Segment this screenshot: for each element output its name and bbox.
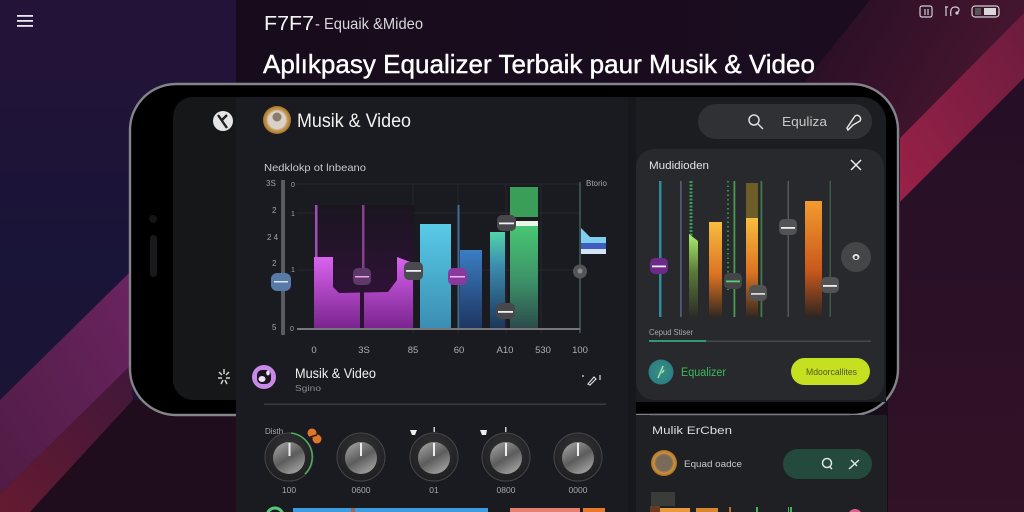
lower right panel: Equad oadce xyxy=(684,459,742,470)
chart x-axis labels: 3S xyxy=(358,345,370,356)
lower panel green pill xyxy=(783,449,872,479)
lower panel thumbnails xyxy=(650,492,862,512)
phone frame xyxy=(130,84,898,415)
chart x-axis labels: 100 xyxy=(572,345,588,356)
equalizer chart xyxy=(266,179,607,356)
knobs row: Disth xyxy=(265,427,283,436)
chart y-axis labels: 0 xyxy=(291,182,295,189)
top label: - Equaik &Mideo xyxy=(315,16,423,33)
knob 3: 01 xyxy=(429,485,439,495)
chart slider handles xyxy=(271,215,587,319)
section: music and video header: Sgino xyxy=(295,384,322,393)
knob 2: 0600 xyxy=(352,485,371,495)
chart y-axis labels: 3S xyxy=(266,179,276,188)
chart y-axis labels: 0 xyxy=(290,326,294,333)
lime button xyxy=(791,358,870,385)
screen left rail xyxy=(173,97,293,400)
main column xyxy=(236,97,887,512)
lower right panel: Mulik ErCben xyxy=(652,425,732,437)
knob 1: 100 xyxy=(282,485,296,495)
chart y-axis labels: 1 xyxy=(291,211,295,218)
chart y-axis labels: 2 4 xyxy=(267,233,279,242)
top label: F7F7 xyxy=(264,13,314,35)
chart y-axis labels xyxy=(266,179,607,333)
section: music and video header xyxy=(252,365,600,393)
orange badge xyxy=(308,428,322,444)
chart y-axis labels: 1 xyxy=(291,267,295,274)
app header xyxy=(263,106,411,134)
app header: Musik & Video xyxy=(297,111,411,132)
knob 5 xyxy=(554,433,602,495)
lower panel avatar xyxy=(651,450,677,476)
equalizer label: Equalizer xyxy=(681,367,726,379)
search pill: Equliza xyxy=(782,115,827,129)
knob 4: 0800 xyxy=(497,485,516,495)
floating panel: mixer xyxy=(636,149,884,400)
chart y-axis labels: 2 xyxy=(272,259,277,268)
knob 2 xyxy=(337,433,385,495)
divider xyxy=(264,404,606,405)
hamburger menu icon xyxy=(17,15,33,27)
lower right panel xyxy=(650,425,872,512)
chart y-axis labels: 5 xyxy=(272,323,277,332)
progress slider: Cepud Stiser xyxy=(649,327,693,337)
mixer bars and sliders xyxy=(650,181,839,317)
knob 4 xyxy=(480,427,530,495)
section: music and video header: Musik & Video xyxy=(295,365,376,381)
top label xyxy=(264,13,423,35)
lime button: Mdoorcallites xyxy=(806,367,857,378)
chart x-axis labels: 0 xyxy=(311,345,317,356)
title: Aplıkpasy Equalizer Terbaik paur Musik & Video xyxy=(263,49,815,79)
chart x-axis labels: 85 xyxy=(408,345,418,356)
chart x-axis labels: 60 xyxy=(454,345,464,356)
knobs row xyxy=(265,427,602,495)
chart x-axis labels xyxy=(311,345,588,356)
knob 5: 0000 xyxy=(569,485,588,495)
close icon xyxy=(851,160,861,170)
knob 3 xyxy=(410,427,458,495)
chart y-axis labels: Btorio xyxy=(586,179,607,188)
chart x-axis labels: A10 xyxy=(497,345,513,356)
bottom colour strip xyxy=(267,508,605,512)
search pill xyxy=(698,104,872,139)
equalizer label xyxy=(648,360,726,384)
round knob button xyxy=(841,242,871,272)
phone bottom edge highlight over right column xyxy=(650,414,850,416)
status icons xyxy=(920,6,999,17)
phone side: camera and speaker xyxy=(149,215,157,277)
chart x-axis labels: 530 xyxy=(535,345,551,356)
knob 1 xyxy=(265,433,313,495)
chart heading: Nedklokp ot lnbeano xyxy=(264,162,366,174)
floating panel: mixer: Mudidioden xyxy=(649,160,709,172)
chart y-axis labels: 2 xyxy=(272,206,277,215)
